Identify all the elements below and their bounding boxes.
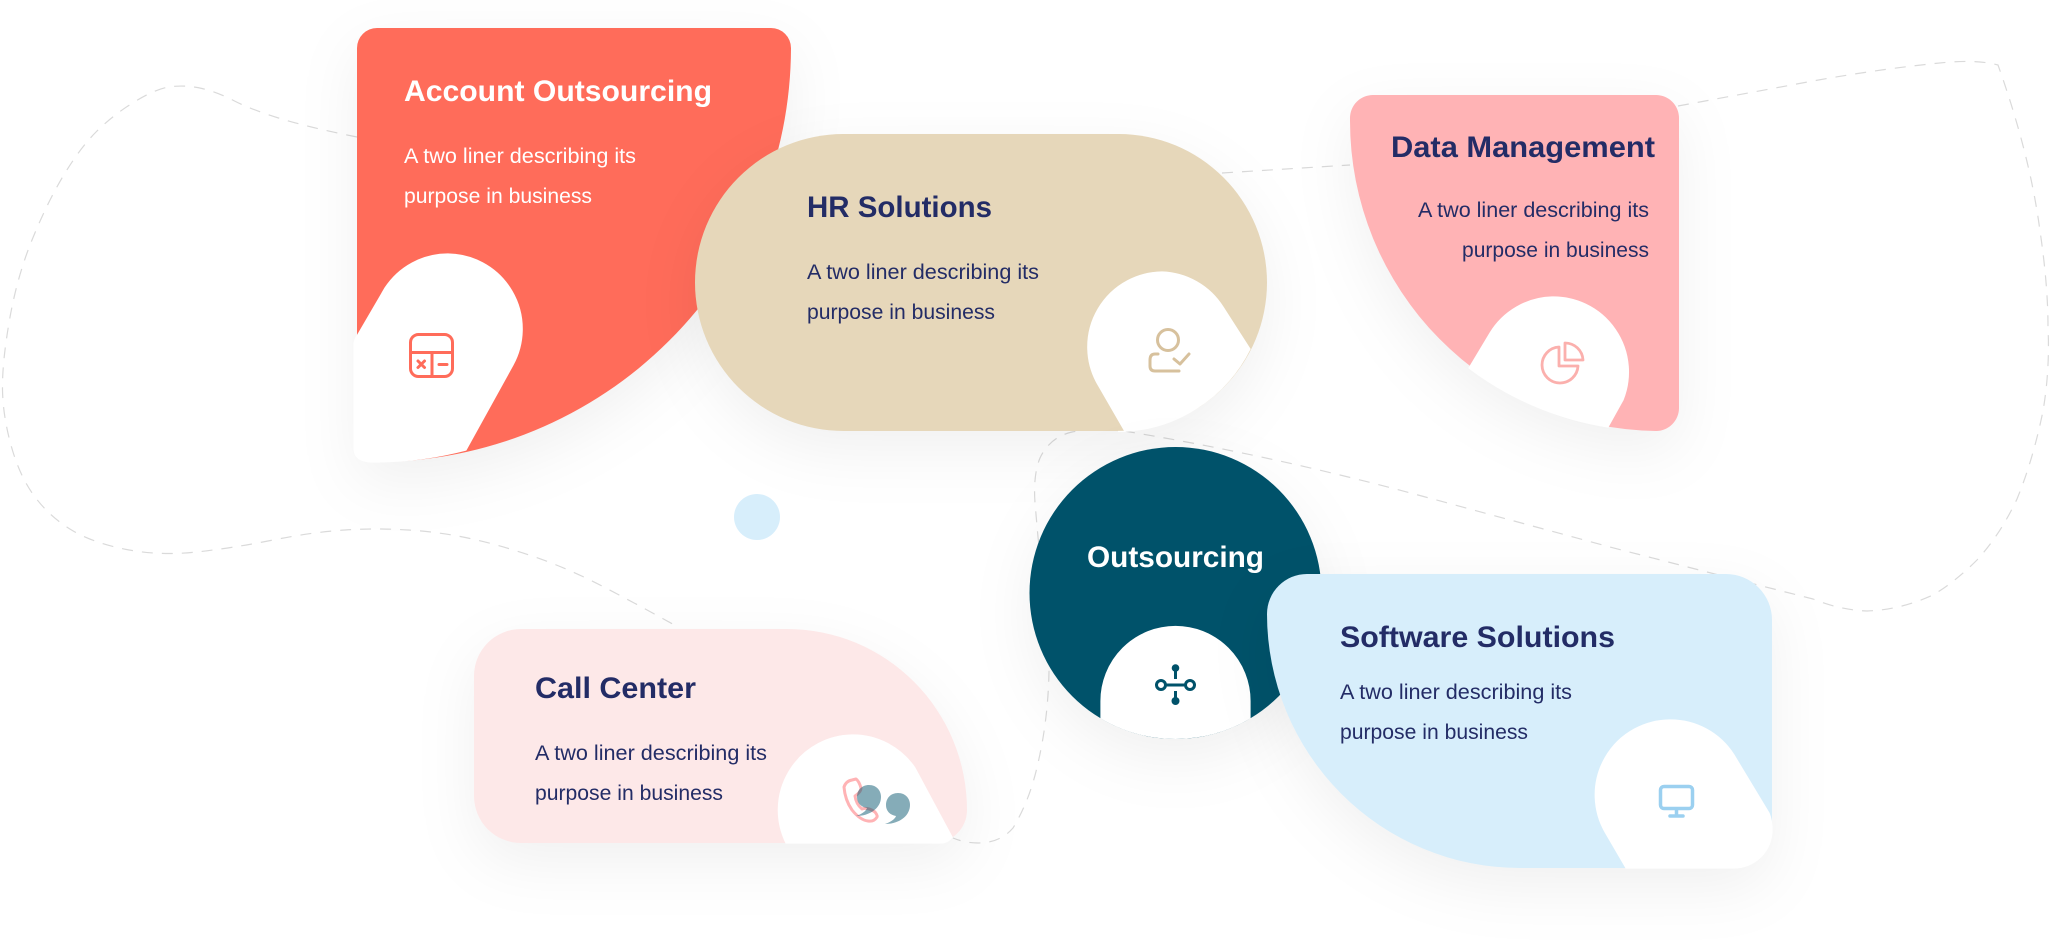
panel: HR solutions — [695, 134, 1267, 432]
icon tab — [354, 254, 522, 462]
panel: account outsourcing — [354, 28, 791, 462]
icon tab — [778, 735, 952, 843]
icon: calculator — [410, 334, 452, 376]
description: A two liner describing its — [535, 742, 767, 765]
heading: Data Management — [1391, 131, 1655, 164]
card shape — [695, 134, 1267, 431]
icon: network node — [1156, 664, 1194, 705]
dashed connector: HR to data — [1222, 165, 1350, 173]
description line two: purpose in business — [404, 185, 592, 208]
icon tab — [1595, 720, 1772, 868]
dashed connector: right loop — [953, 61, 2048, 843]
card shape — [1267, 574, 1772, 868]
description line two: purpose in business — [1462, 239, 1649, 262]
panel: software solutions — [1267, 574, 1772, 868]
description: A two liner describing its — [807, 261, 1039, 284]
description line two: purpose in business — [535, 782, 723, 805]
description: A two liner describing its — [1340, 681, 1572, 704]
panel: outsourcing hub — [1030, 447, 1322, 739]
description: A two liner describing its — [404, 145, 636, 168]
heading: Call Center — [535, 672, 696, 705]
description line two: purpose in business — [807, 301, 995, 324]
heading: Software Solutions — [1340, 621, 1615, 654]
icon tab — [1101, 626, 1250, 738]
decorative dot — [734, 494, 780, 540]
icon: phone with speech marks — [844, 779, 910, 824]
heading: Account Outsourcing — [404, 75, 712, 108]
card shape — [357, 28, 791, 462]
hub circle — [1030, 447, 1322, 739]
icon tab — [1469, 297, 1628, 427]
icon tab — [1088, 272, 1250, 432]
icon: monitor — [1660, 786, 1692, 816]
heading: Outsourcing — [1087, 541, 1264, 574]
card shape — [1350, 95, 1679, 431]
description line two: purpose in business — [1340, 721, 1528, 744]
dashed connector: left loop — [2, 86, 678, 627]
panel: call center — [474, 629, 967, 843]
description: A two liner describing its — [1418, 199, 1649, 222]
heading: HR Solutions — [807, 191, 992, 224]
icon: person check — [1150, 330, 1189, 371]
icon: pie chart — [1542, 343, 1583, 383]
panel: data management — [1350, 95, 1679, 431]
card shape — [474, 629, 967, 843]
